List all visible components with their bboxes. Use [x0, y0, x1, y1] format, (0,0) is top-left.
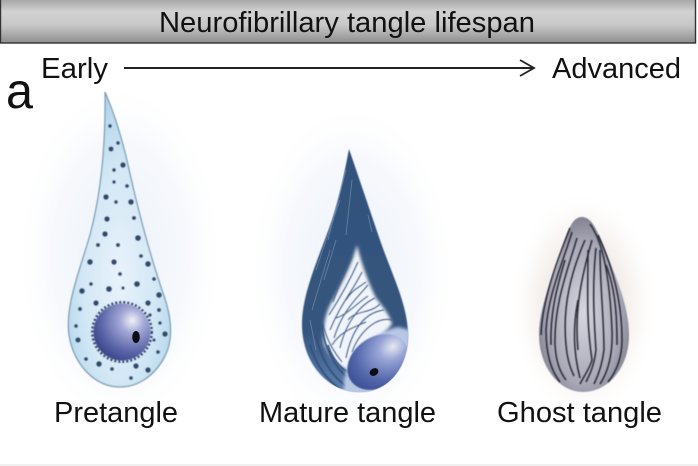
panel: ghost tangle cell	[509, 190, 659, 420]
label: Pretangle: Pretangle	[54, 397, 178, 429]
cleared white cytoplasm	[323, 245, 392, 372]
arrow: early to advanced	[124, 60, 534, 76]
panel: mature tangle cell	[283, 148, 422, 393]
label: Mature tangle: Mature tangle	[259, 397, 436, 429]
pale perinuclear crescent	[344, 327, 410, 395]
panel: pretangle cell	[15, 80, 225, 430]
dark streaks lower left	[310, 325, 350, 390]
vesicles	[74, 124, 168, 380]
title bar: Neurofibrillary tangle lifespan	[159, 7, 535, 39]
cell body	[539, 217, 629, 392]
fibril strands	[322, 256, 392, 362]
title bar	[0, 0, 696, 43]
fibril strands	[541, 224, 622, 384]
label: Advanced: Advanced	[552, 53, 681, 85]
nucleus with perinuclear granules	[92, 302, 152, 362]
panel letter a: a	[6, 63, 33, 119]
label: Ghost tangle: Ghost tangle	[497, 397, 662, 429]
nucleus	[346, 334, 407, 390]
dense fibril highlights	[310, 170, 372, 350]
cell body	[68, 92, 171, 387]
label: Early: Early	[41, 53, 109, 85]
cell body	[302, 149, 408, 392]
